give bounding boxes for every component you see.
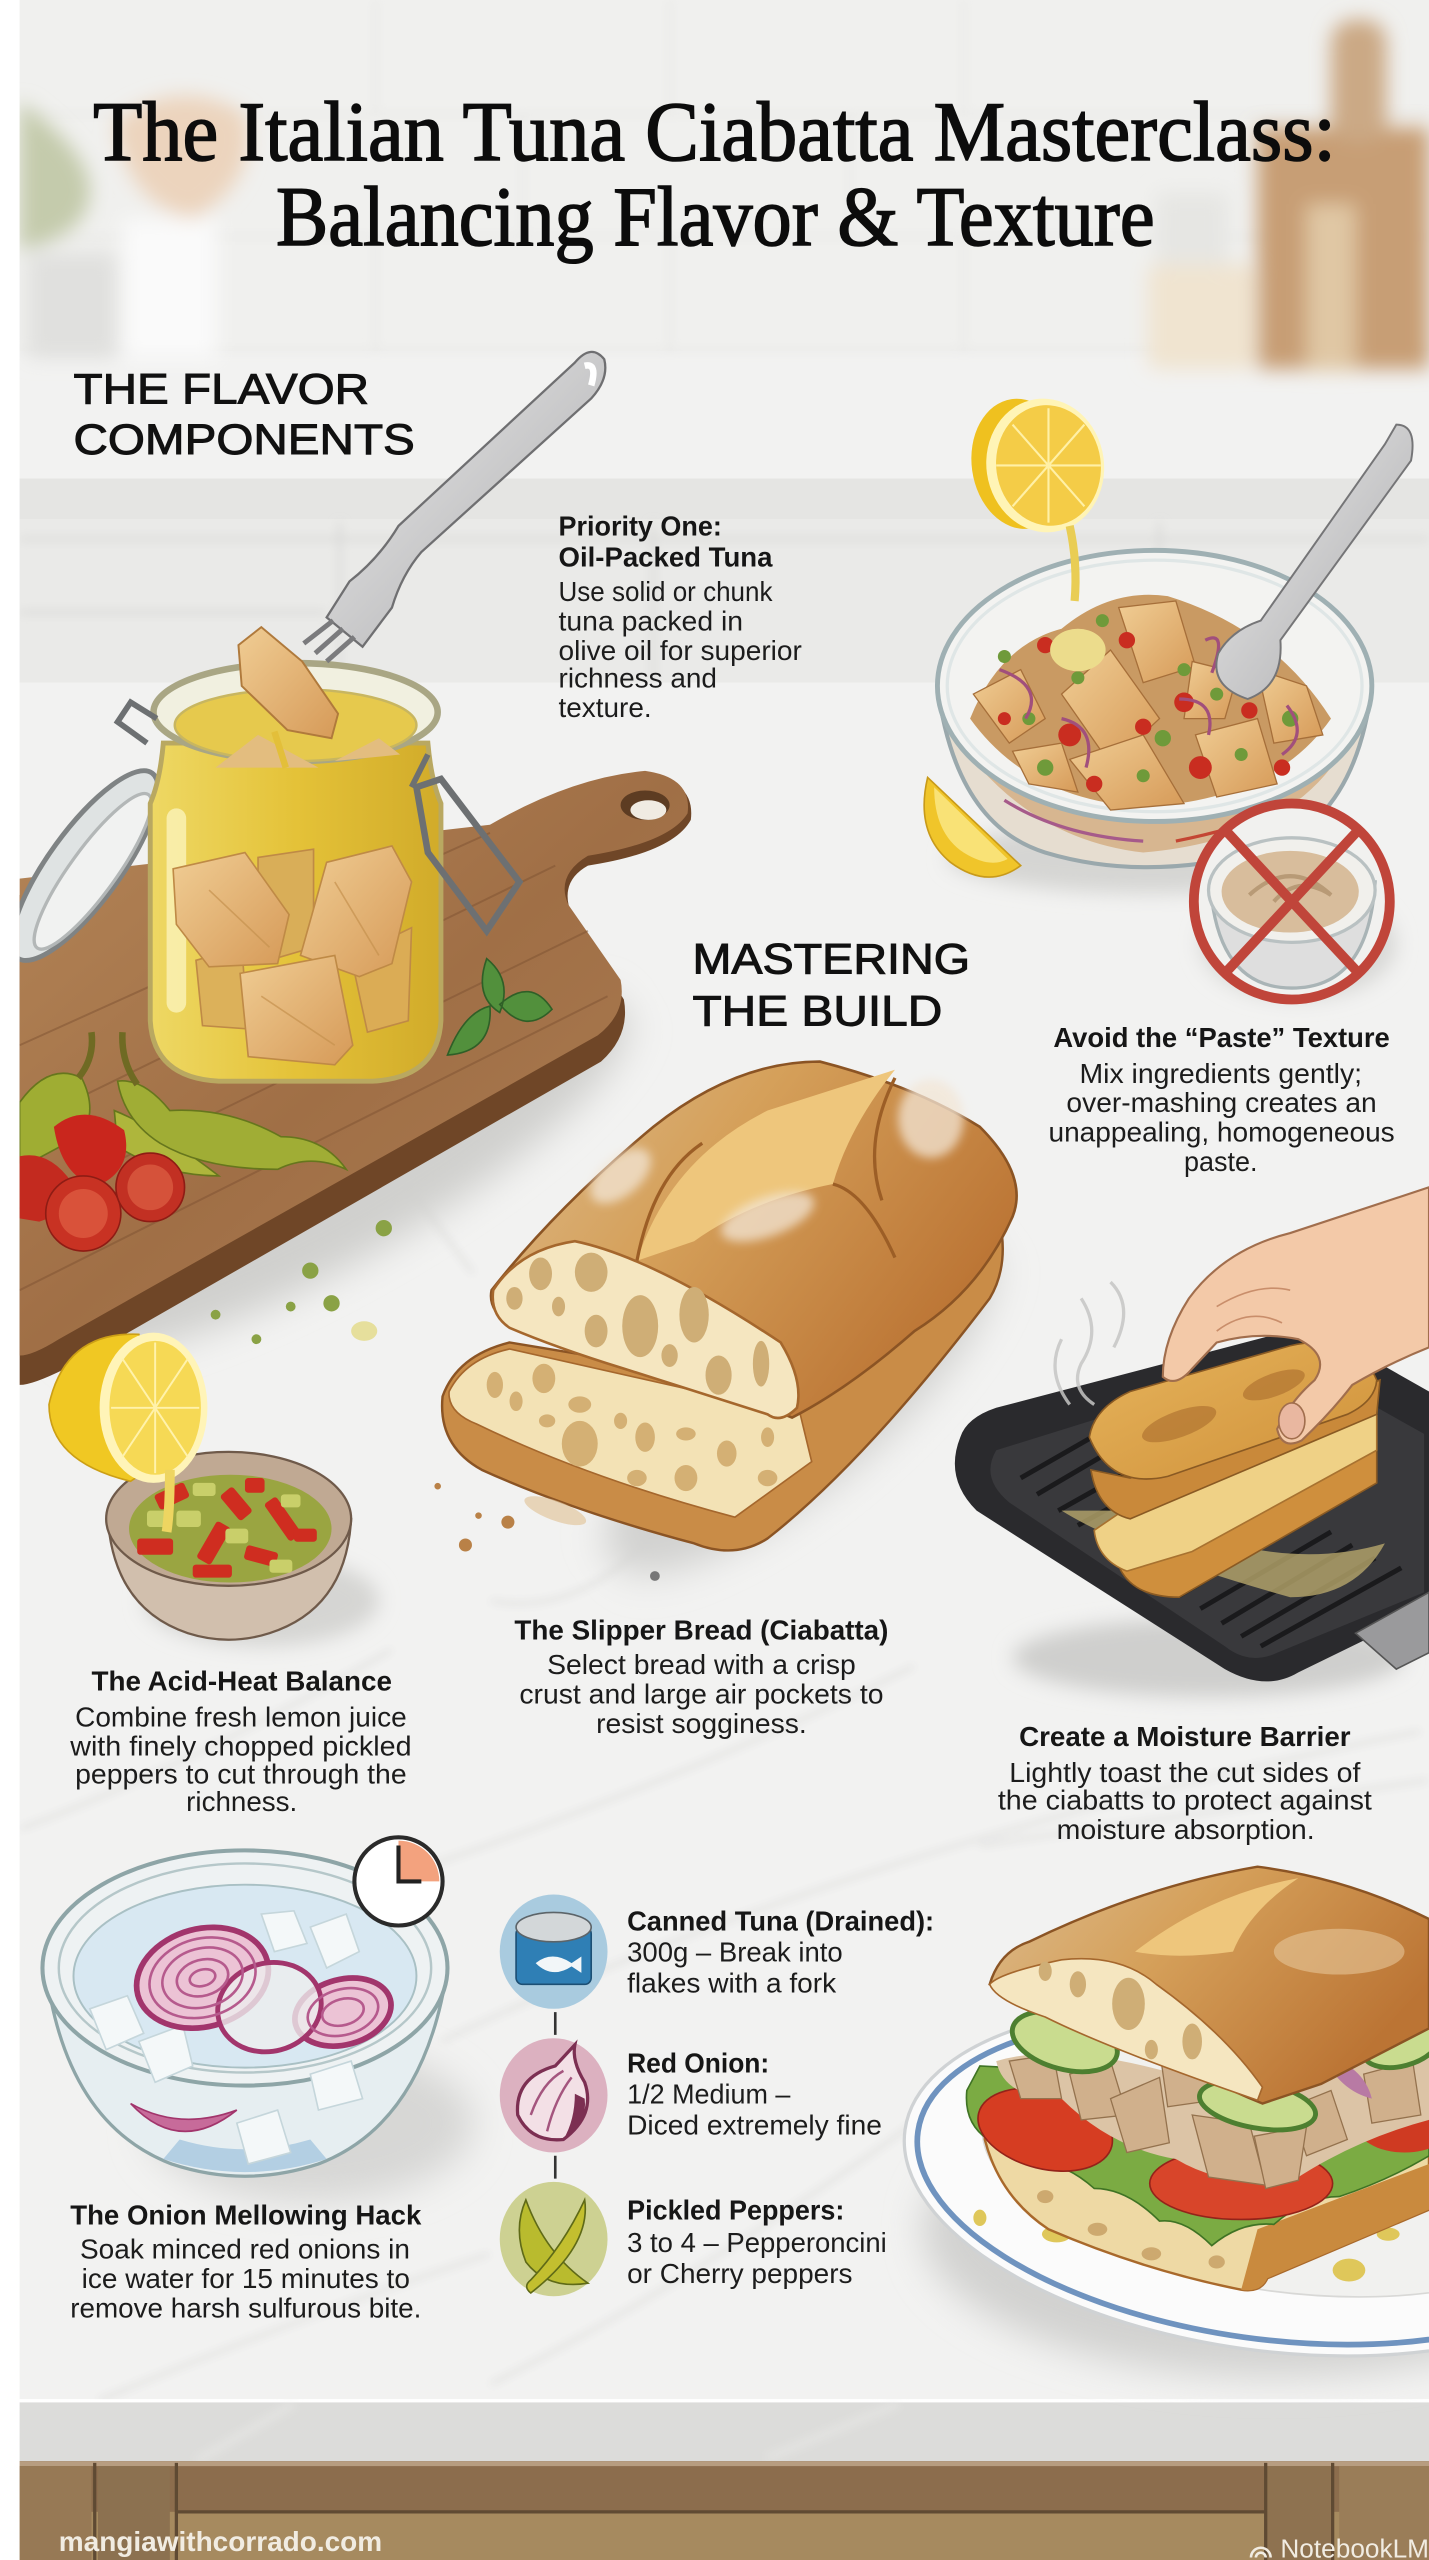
pouring lemon half [963, 392, 1078, 535]
text: canned tuna: flakes with a fork [627, 1967, 836, 1998]
cucumbers [1006, 2001, 1124, 2082]
text: avoid the paste texture: Mix ingredients gently; [1080, 1058, 1362, 1089]
icon: pickled peppers [500, 2182, 608, 2296]
text: priority one oil-packed tuna: Use solid or chunk [559, 576, 773, 607]
wood cabinet [0, 2461, 1429, 2560]
text: the acid-heat balance: peppers to cut through the [75, 1758, 407, 1789]
marble veins [20, 996, 1429, 2401]
illustration: cutting board with jar of oil-packed tuna, peppers and tomatoes [0, 352, 691, 1410]
crumbs [434, 1483, 660, 1581]
jar rim [154, 663, 438, 761]
connector [554, 2012, 556, 2179]
text: priority one oil-packed tuna: Oil-Packed Tuna [559, 542, 773, 573]
left page margin [0, 0, 20, 2560]
text: the acid-heat balance: with finely chopped pickled [69, 1731, 412, 1762]
text: create a moisture barrier: Lightly toast the cut sides of [1009, 1757, 1361, 1788]
heading: mastering the build: THE BUILD [692, 988, 942, 1035]
grill pan [955, 1328, 1429, 1681]
title: The Italian Tuna Ciabatta Masterclass: [93, 85, 1336, 179]
illustration: finished sandwich on plate [881, 1867, 1429, 2399]
text: avoid the paste texture: unappealing, homogeneous [1048, 1117, 1395, 1148]
text: priority one oil-packed tuna: texture. [559, 692, 652, 723]
spoon [1216, 425, 1413, 699]
scattered pepper bits [211, 1220, 392, 1344]
cutting board [20, 774, 691, 1385]
text: priority one oil-packed tuna: Priority One: [559, 511, 722, 542]
text: pickled peppers [627, 2194, 887, 2289]
text: create a moisture barrier: moisture absorption. [1057, 1814, 1315, 1845]
text: the slipper bread: Select bread with a crisp [547, 1649, 856, 1680]
icon: red onion [500, 2038, 608, 2153]
text: avoid the paste texture: paste. [1184, 1146, 1258, 1177]
text: the onion mellowing hack: ice water for 15 minutes to [82, 2263, 410, 2294]
text: the onion mellowing hack [70, 2199, 422, 2323]
text: red onion [627, 2047, 882, 2141]
text: create a moisture barrier [998, 1721, 1372, 1845]
lemon wedge [924, 777, 1021, 877]
green peppers [20, 1073, 346, 1176]
text: the slipper bread: resist sogginess. [596, 1708, 807, 1739]
illustration: ciabatta loaf and slice [434, 1062, 1040, 1625]
illustration: glass bowl of tuna salad with lemon and spoon [924, 391, 1413, 893]
onion rings [125, 1913, 399, 2056]
text: create a moisture barrier: the ciabatts to protect against [998, 1785, 1372, 1816]
text: the acid-heat balance: The Acid-Heat Balance [91, 1665, 392, 1696]
heading: mastering the build [692, 935, 970, 1035]
icon: canned tuna [500, 1894, 608, 2009]
text: pickled peppers: 3 to 4 – Pepperoncini [627, 2227, 887, 2258]
bottom bread [985, 2123, 1429, 2290]
text: priority one oil-packed tuna: olive oil for superior [559, 635, 802, 666]
hand [1163, 1187, 1429, 1444]
top bread [990, 1867, 1429, 2104]
heading: the flavor components: THE FLAVOR [73, 365, 369, 412]
illustration: glass bowl of onions in ice water with timer [42, 1837, 474, 2202]
heading: mastering the build: MASTERING [692, 935, 970, 982]
text: priority one oil-packed tuna: richness and [559, 663, 717, 694]
upper loaf [491, 1062, 1017, 1418]
ingredient list with icons [500, 1894, 934, 2296]
tuna on fork [238, 627, 338, 738]
title [93, 85, 1336, 264]
ice cubes [90, 1911, 363, 2164]
text: canned tuna: Canned Tuna (Drained): [627, 1905, 934, 1936]
text: the acid-heat balance [69, 1665, 412, 1817]
steam [1055, 1282, 1124, 1405]
open jar lid [20, 768, 156, 963]
footer: site url: mangiawithcorrado.com [59, 2526, 382, 2557]
text: the onion mellowing hack: remove harsh sulfurous bite. [70, 2292, 421, 2323]
text: red onion: Red Onion: [627, 2047, 769, 2078]
illustration: toasting ciabatta on grill pan with hand [955, 1187, 1429, 1697]
text: the onion mellowing hack: Soak minced red onions in [80, 2234, 410, 2265]
counter front edge [0, 2399, 1429, 2403]
fork [327, 352, 605, 647]
text: red onion: 1/2 Medium – [627, 2079, 791, 2110]
lower slice [442, 1220, 1003, 1550]
title: Balancing Flavor & Texture [276, 170, 1155, 264]
text: create a moisture barrier: Create a Moisture Barrier [1019, 1721, 1351, 1752]
timer clock [354, 1837, 443, 1926]
text: the onion mellowing hack: The Onion Mellowing Hack [70, 2199, 422, 2230]
text: avoid the paste texture: Avoid the “Paste” Texture [1053, 1022, 1390, 1053]
heading: the flavor components [73, 365, 415, 463]
text: the acid-heat balance: richness. [186, 1786, 297, 1817]
tuna cubes [173, 846, 412, 1065]
text: pickled peppers: Pickled Peppers: [627, 2194, 844, 2225]
text: the acid-heat balance: Combine fresh lemon juice [75, 1701, 407, 1732]
glass jar [150, 743, 441, 1081]
blurred shelf props [20, 20, 1429, 371]
wire clasp [416, 779, 519, 931]
pan handle [1356, 1592, 1429, 1669]
text: red onion: Diced extremely fine [627, 2110, 882, 2141]
tomatoes [969, 2075, 1121, 2184]
text: avoid the paste texture [1048, 1022, 1395, 1177]
plate [881, 1961, 1429, 2399]
text: canned tuna [627, 1905, 934, 1998]
text: priority one oil-packed tuna [559, 511, 802, 723]
tuna filling [996, 2041, 1429, 2182]
text: canned tuna: 300g – Break into [627, 1936, 843, 1967]
text: the slipper bread [514, 1615, 888, 1739]
basil leaves [447, 959, 552, 1055]
text: the slipper bread: The Slipper Bread (Ciabatta) [514, 1615, 888, 1646]
toast stack [1120, 1437, 1377, 1597]
text: pickled peppers: or Cherry peppers [627, 2258, 853, 2289]
cut crumb face [493, 1241, 798, 1418]
icon: crossed-out paste bowl [1194, 804, 1396, 1000]
grease [1062, 1511, 1385, 1597]
text: the slipper bread: crust and large air pockets to [519, 1678, 884, 1709]
lettuce [966, 2066, 1429, 2246]
illustration: chopped peppers bowl with lemon [49, 1333, 379, 1646]
lemon half [49, 1334, 171, 1481]
red peppers and tomatoes [54, 1115, 126, 1186]
text: avoid the paste texture: over-mashing creates an [1066, 1087, 1377, 1118]
text: priority one oil-packed tuna: tuna packed in [559, 605, 743, 636]
heading: the flavor components: COMPONENTS [73, 416, 415, 463]
